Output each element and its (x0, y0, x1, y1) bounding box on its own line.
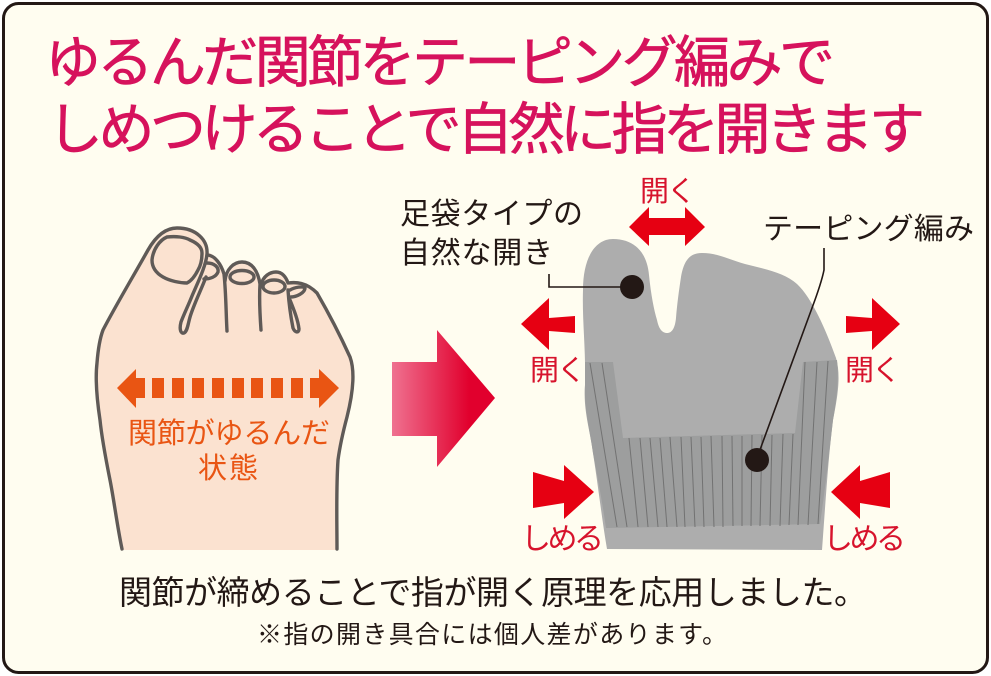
arrow: open top (629, 176, 705, 246)
arrow: open left: 開く (530, 355, 586, 387)
foot label (128, 417, 330, 485)
arrow: open right (845, 298, 901, 387)
label: taping knit: テーピング編み (763, 213, 974, 246)
arrow: open right: 開く (845, 355, 901, 387)
title (45, 31, 925, 161)
arrow: dotted double arrow (117, 369, 339, 408)
foot shape (96, 228, 353, 550)
title: しめつけることで自然に指を開きます (47, 98, 925, 161)
foot label: 関節がゆるんだ (128, 417, 330, 450)
arrow: open top: 開く (640, 176, 696, 208)
sock shape (583, 239, 839, 550)
arrow: open left (521, 298, 586, 387)
foot label: 状態 (198, 452, 258, 485)
label: tabi type (400, 198, 583, 270)
caption: 関節が締めることで指が開く原理を応用しました。 (119, 574, 867, 611)
leader: big toe dot (549, 274, 644, 299)
label: tabi type: 足袋タイプの (400, 198, 583, 231)
taping knit band (585, 360, 838, 528)
arrow: main gradient arrow (392, 330, 495, 467)
arrow: tighten left: しめる (521, 523, 604, 556)
sock illustration (549, 239, 839, 550)
title: ゆるんだ関節をテーピング編みで (45, 31, 835, 94)
arrow: tighten right: しめる (823, 523, 906, 556)
arrow: tighten left (521, 465, 604, 556)
arrow: tighten right (823, 465, 906, 556)
foot outline (96, 228, 353, 549)
footnote: ※指の開き具合には個人差があります。 (257, 621, 727, 649)
leader: taping knit dot (745, 248, 824, 472)
label: tabi type: 自然な開き (400, 237, 553, 270)
foot illustration (96, 228, 353, 550)
